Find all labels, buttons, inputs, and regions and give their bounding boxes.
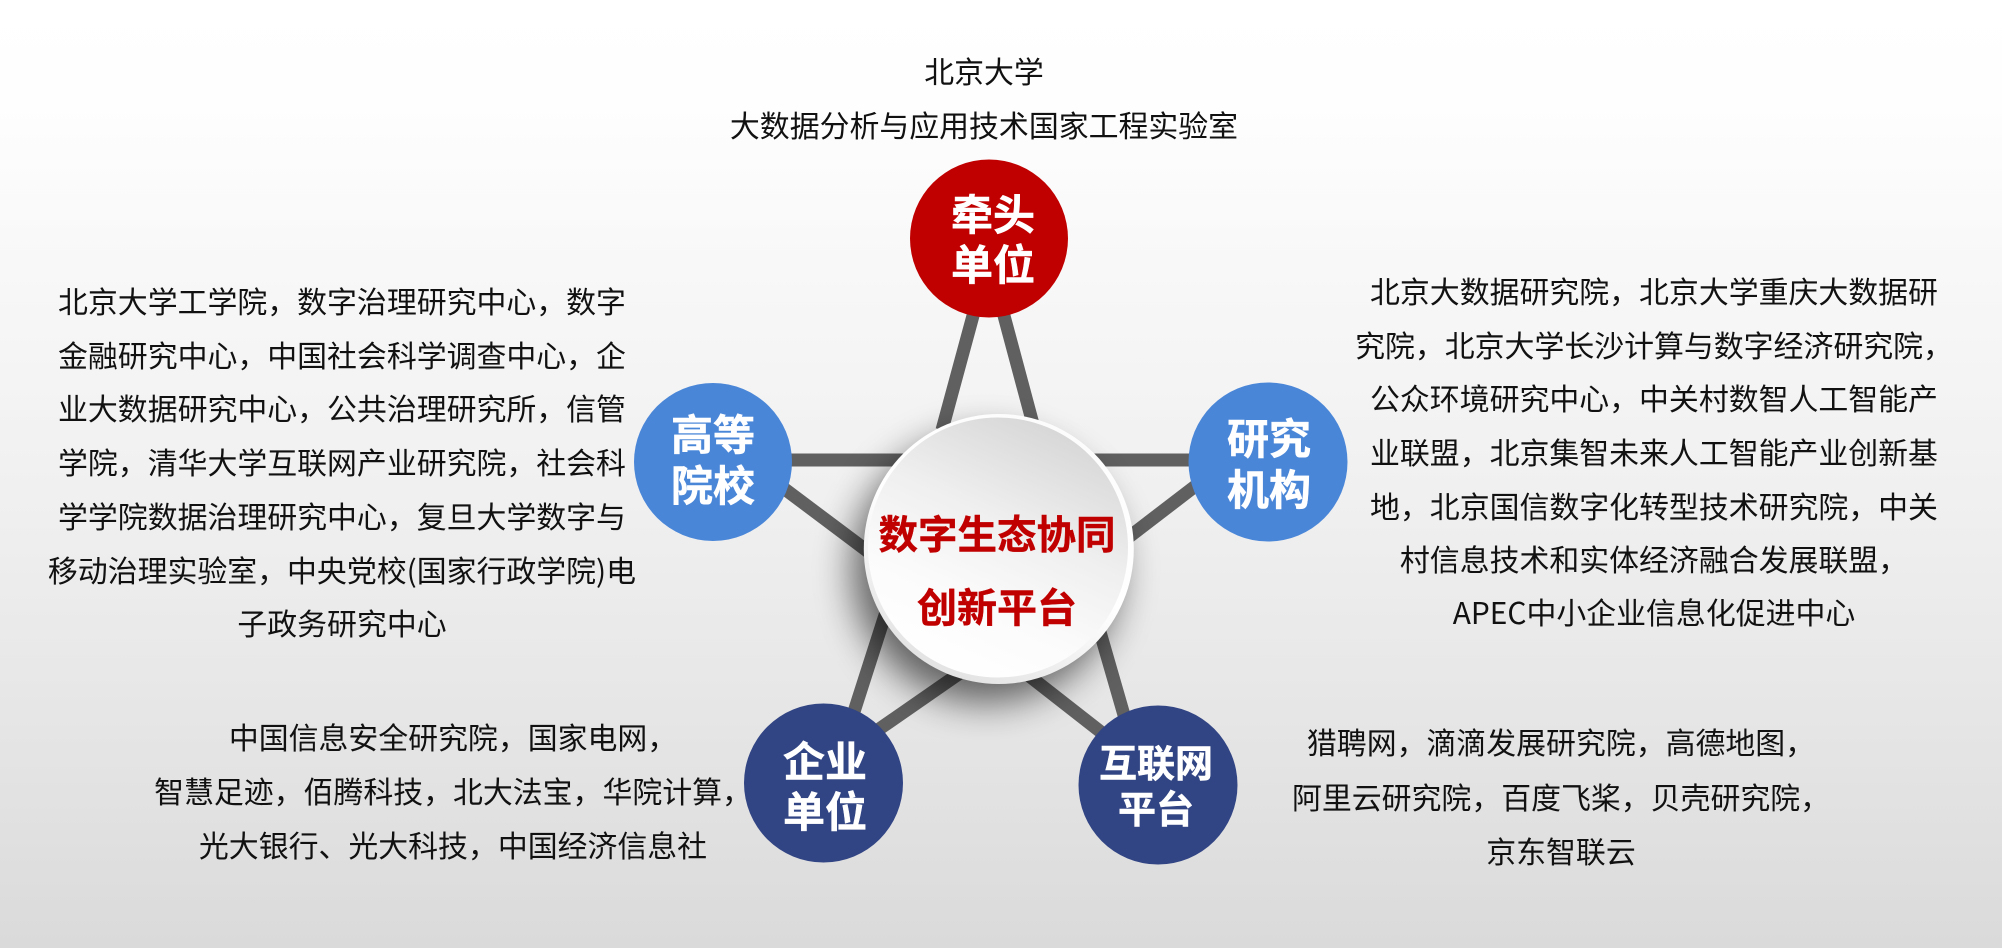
node: research institutes <box>1188 382 1348 542</box>
node: universities: 高等 <box>671 412 755 459</box>
text block: universities list <box>48 287 636 642</box>
text block: internet platforms list <box>1292 728 1830 870</box>
node: internet platforms: 平台 <box>1118 790 1194 832</box>
node: internet platforms: 互联网 <box>1099 744 1213 786</box>
text block: research institutes list: 公众环境研究中心，中关村数智人工智能产 <box>1370 384 1938 417</box>
node: enterprises: 企业 <box>783 739 867 786</box>
text block: research institutes list: 北京大数据研究院，北京大学重庆大数据研 <box>1370 277 1938 310</box>
title: lead institution: 北京大学 <box>924 57 1044 90</box>
node: lead unit: 单位 <box>951 242 1035 289</box>
text block: research institutes list <box>1355 277 1953 633</box>
node: universities: 院校 <box>671 463 755 510</box>
node: internet platforms <box>1078 706 1238 864</box>
text block: universities list: 子政务研究中心 <box>237 609 447 642</box>
text block: universities list: 学学院数据治理研究中心，复旦大学数字与 <box>58 502 626 535</box>
centre hub <box>852 414 1134 703</box>
text block: enterprises list: 智慧足迹，佰腾科技，北大法宝，华院计算， <box>154 777 752 810</box>
text block: universities list: 学院，清华大学互联网产业研究院，社会科 <box>58 448 626 481</box>
text block: internet platforms list: 京东智联云 <box>1486 837 1636 870</box>
centre hub: 创新平台 <box>917 587 1077 631</box>
title: lead institution: 大数据分析与应用技术国家工程实验室 <box>730 111 1238 144</box>
text block: internet platforms list: 阿里云研究院，百度飞桨，贝壳研究院， <box>1292 783 1830 816</box>
title: lead institution <box>730 57 1238 144</box>
text block: internet platforms list: 猎聘网，滴滴发展研究院，高德地图， <box>1307 728 1815 761</box>
node: enterprises: 单位 <box>783 789 867 836</box>
text block: research institutes list: 业联盟，北京集智未来人工智能产业创新基 <box>1370 438 1938 471</box>
text block: research institutes list: 地，北京国信数字化转型技术研究院，中关 <box>1370 492 1938 525</box>
text block: universities list: 移动治理实验室，中央党校(国家行政学院)电 <box>48 547 636 591</box>
text block: research institutes list: 究院，北京大学长沙计算与数字经济研究院， <box>1355 331 1953 364</box>
node: research institutes: 机构 <box>1227 467 1311 514</box>
text block: universities list: 北京大学工学院，数字治理研究中心，数字 <box>58 287 626 320</box>
node: research institutes: 研究 <box>1227 416 1311 463</box>
text block: enterprises list: 光大银行、光大科技，中国经济信息社 <box>199 831 707 864</box>
text block: enterprises list: 中国信息安全研究院，国家电网， <box>229 723 677 756</box>
node: universities <box>634 383 792 541</box>
text block: enterprises list <box>154 723 752 864</box>
text block: universities list: 金融研究中心，中国社会科学调查中心，企 <box>58 341 626 374</box>
star connector lines <box>782 312 1198 736</box>
text block: research institutes list: APEC中小企业信息化促进中心 <box>1453 589 1855 633</box>
node: lead unit: 牵头 <box>951 192 1035 239</box>
centre hub: 数字生态协同 <box>878 514 1116 558</box>
node: enterprises <box>744 704 903 862</box>
text block: universities list: 业大数据研究中心，公共治理研究所，信管 <box>58 394 626 427</box>
node: lead unit <box>910 160 1068 318</box>
text block: research institutes list: 村信息技术和实体经济融合发展联盟， <box>1400 545 1908 578</box>
